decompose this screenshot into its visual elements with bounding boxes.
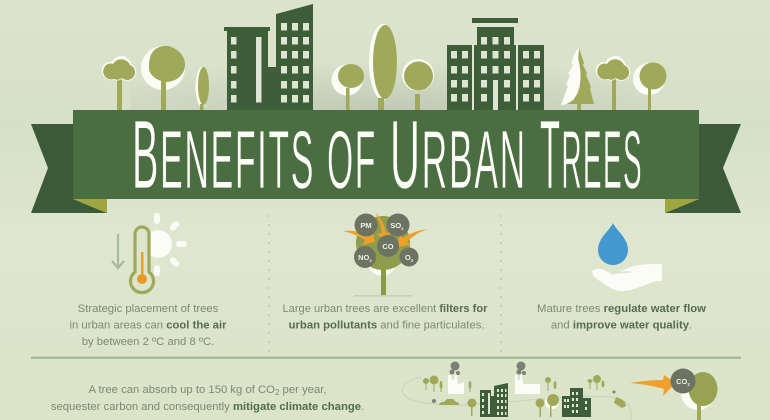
panel: cool the air — [70, 213, 227, 348]
building: left office block — [224, 4, 313, 110]
pollutant: CO: CO — [382, 242, 394, 251]
pollutant: SOx: x — [401, 226, 404, 231]
title: OF — [327, 113, 377, 206]
car left — [432, 399, 459, 405]
icon: tree with pollutants — [343, 213, 428, 296]
small tree centre — [468, 398, 476, 416]
skyline: trees and buildings — [102, 4, 667, 111]
tree: round far right — [633, 62, 666, 111]
car right — [612, 390, 626, 408]
panel: filters for pollutants — [282, 213, 488, 332]
arrow: CO2 — [630, 375, 676, 396]
ribbon: right tail — [665, 124, 741, 213]
icon: thermometer — [130, 227, 153, 293]
icon: water drop — [598, 223, 628, 265]
factory left — [448, 362, 464, 394]
ribbon: main band — [73, 110, 699, 199]
icon: CO2 absorbing tree — [630, 368, 718, 420]
tree: large crown with white shadow — [141, 46, 185, 111]
tree: pine — [561, 48, 594, 111]
icon: sun — [144, 213, 187, 276]
pollutant: SOx — [386, 214, 410, 236]
factory right — [515, 362, 540, 394]
text: water: and improve water quality. — [551, 320, 692, 332]
title: BENEFITS — [132, 100, 315, 209]
road arc — [402, 377, 631, 420]
building: right apartment block — [447, 18, 544, 110]
small trees centre right — [536, 394, 559, 417]
horizontal divider — [31, 356, 741, 359]
small trees factory right — [545, 377, 556, 391]
pollutant: NOx: NO — [358, 253, 369, 262]
column dividers — [269, 215, 501, 354]
tree: round — [402, 59, 434, 111]
text: cool the air: by between 2 ºC and 8 ºC. — [82, 336, 214, 348]
bubble: CO2: 2 — [687, 382, 690, 387]
pollutant: O3: O — [405, 253, 411, 262]
tree: narrow oval — [196, 67, 209, 111]
ribbon: left tail — [31, 124, 107, 213]
panel: water quality — [537, 223, 706, 332]
tree: round cluster right — [596, 56, 630, 111]
tree: small round with white shadow — [332, 64, 364, 111]
banner ribbon — [31, 100, 741, 213]
text: filters: Large urban trees are excellent filters for — [282, 303, 488, 315]
text: cool the air: Strategic placement of trees — [78, 303, 219, 315]
text: climate change: 2 — [275, 388, 280, 397]
bubble: CO2 — [670, 368, 696, 394]
pollutant: NOx: x — [369, 258, 372, 263]
pollutant: PM: PM — [360, 221, 372, 230]
tree: round cluster left — [102, 56, 136, 111]
mini building right — [562, 388, 591, 417]
text: climate change: A tree can absorb up to 150 kg of CO — [88, 384, 327, 397]
small trees top right — [588, 375, 604, 390]
pollutant: O3 — [400, 248, 418, 266]
icon: open hand — [592, 264, 662, 291]
text: water: Mature trees regulate water flow — [537, 303, 706, 315]
title: URBAN — [390, 100, 527, 209]
text: filters: urban pollutants and fine particulates. — [289, 320, 485, 332]
text: climate change: sequester carbon and consequently mitigate climate change. — [51, 401, 364, 413]
icon: down arrow — [112, 234, 124, 268]
text: climate change: per year, — [279, 384, 327, 396]
pollutant: O3: 3 — [411, 258, 414, 263]
mini building left — [480, 383, 508, 417]
text: cool the air: in urban areas can cool the air — [70, 320, 226, 332]
pollutant: NOx — [354, 246, 376, 268]
tree: tall oval — [369, 24, 397, 111]
bubble: CO2: CO — [676, 377, 687, 386]
illustration: carbon cycle city — [402, 362, 631, 420]
small trees left — [423, 376, 472, 392]
pollutant: SOx: SO — [390, 221, 401, 230]
